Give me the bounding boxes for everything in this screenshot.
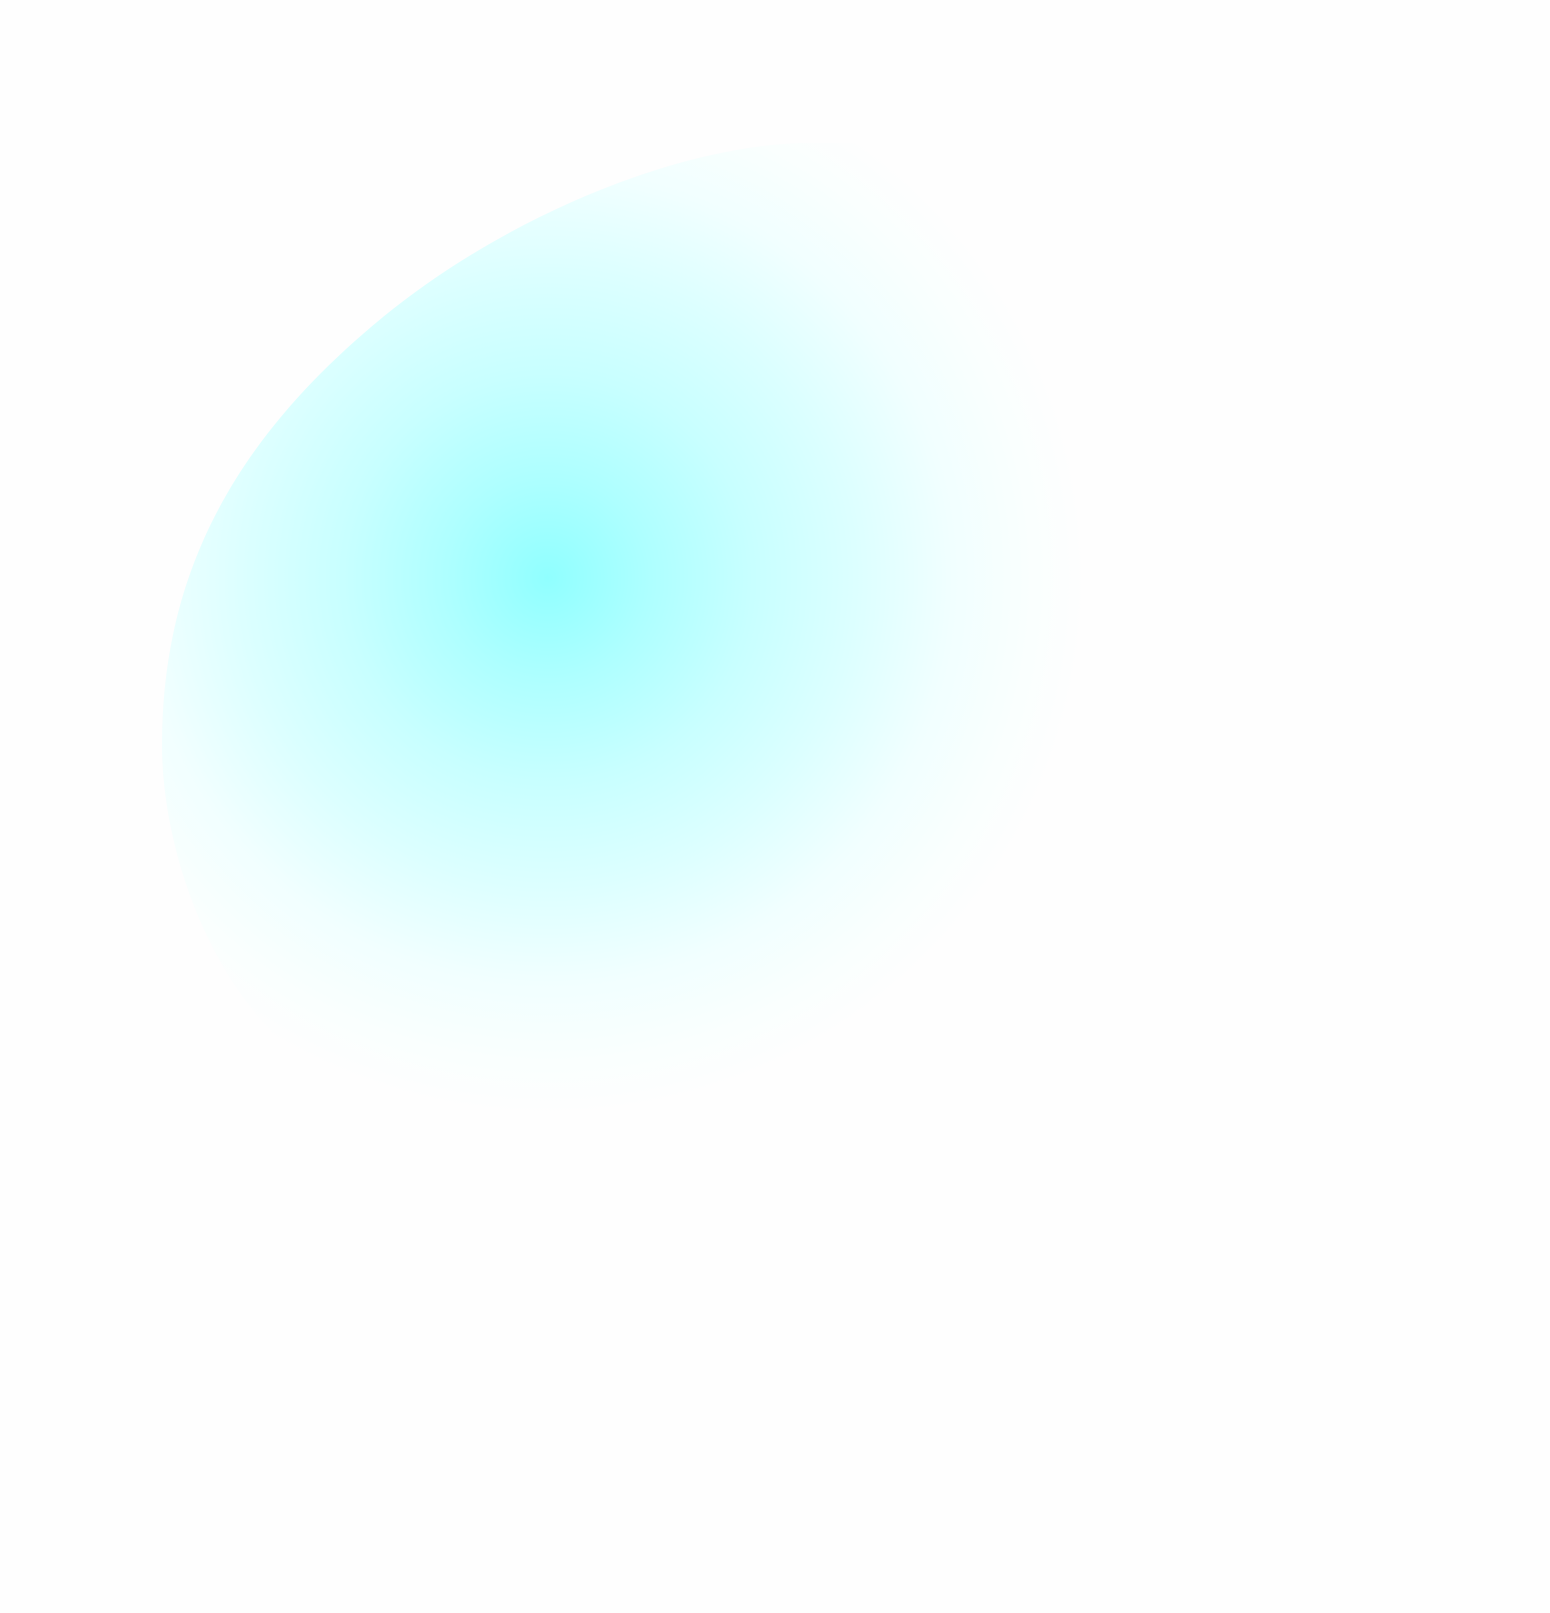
cyan glow shape — [162, 143, 1300, 1300]
